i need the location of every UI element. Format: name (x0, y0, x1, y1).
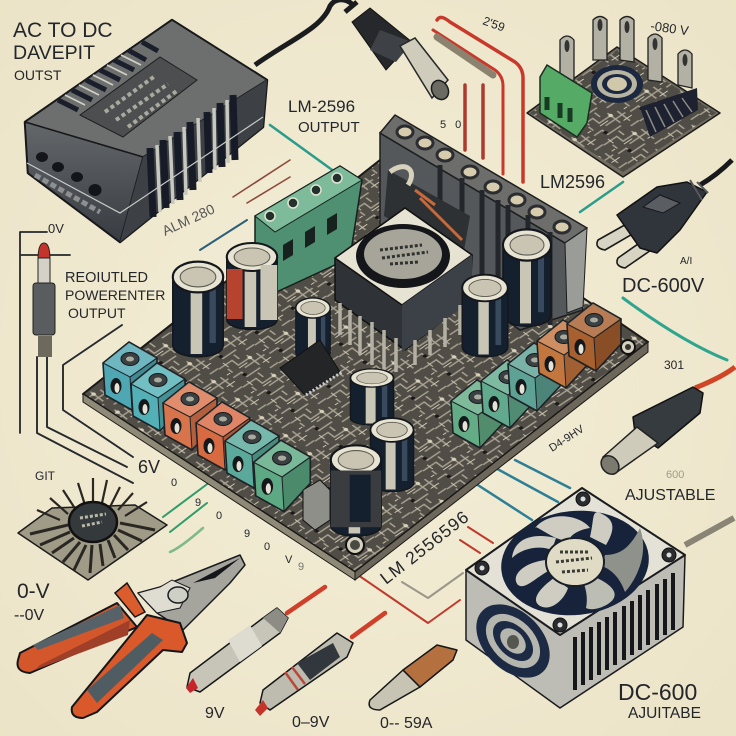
label: LM-2596 output (288, 97, 360, 136)
top DC barrel plug and cable (255, 0, 452, 103)
small handwritten annotations: 0 (216, 510, 222, 522)
small handwritten annotations: 0V (48, 221, 64, 236)
small handwritten annotations: 9 (195, 497, 201, 509)
label: regulated power output: OUTPUT (68, 305, 126, 321)
small handwritten annotations: 5 0 (440, 119, 464, 131)
label: DC-600 adjustable (618, 679, 701, 722)
label: DC-600V: DC-600V (622, 275, 705, 297)
AC power plug and cord (597, 160, 732, 268)
rear terminal block with heat sink (380, 115, 587, 330)
label: regulated power output: POWERENTER (65, 287, 165, 303)
small handwritten annotations: GIT (35, 469, 56, 483)
right DC connector (597, 367, 735, 478)
small handwritten annotations: A/I (680, 256, 692, 267)
top-right small board (527, 16, 720, 177)
label: 9V: 9V (205, 705, 225, 722)
label: 0-V: 0-V (17, 580, 50, 603)
small handwritten annotations: 2'59 (481, 14, 507, 35)
black IC chip (280, 340, 342, 395)
label: AC to DC title: OUTST (14, 67, 62, 83)
capacitors on main board (173, 229, 551, 536)
probe connector two (255, 613, 385, 716)
probe connector one (186, 587, 325, 693)
label: 6V: 6V (138, 457, 160, 477)
label: regulated power output: REOIUTLED (65, 270, 148, 286)
small handwritten annotations: 0 (264, 541, 270, 553)
right terminal blocks (451, 303, 621, 448)
small handwritten annotations: ALM 280 (160, 200, 217, 239)
small handwritten annotations (35, 14, 692, 573)
small handwritten annotations: 301 (664, 358, 684, 372)
label: LM2596: LM2596 (540, 172, 605, 192)
label: adjustable: AJUSTABLE (625, 487, 715, 504)
label: LM-2596 output: OUTPUT (298, 119, 360, 136)
cooling fan power supply (462, 488, 734, 708)
main circuit board (83, 160, 648, 580)
connection wires (20, 17, 727, 623)
small handwritten annotations: 9 (244, 528, 250, 540)
orange-handled pliers (18, 555, 245, 718)
small handwritten annotations: V (285, 554, 293, 566)
label: 0-V: --0V (14, 607, 45, 624)
small handwritten annotations: D4-9HV (547, 423, 587, 455)
small handwritten annotations: -080 V (650, 18, 690, 38)
label: LM 2556596: LM 2556596 (376, 506, 473, 588)
label: LM-2596 output: LM-2596 (288, 97, 355, 116)
audio jack on left (33, 243, 55, 357)
label: DC-600 adjustable: DC-600 (618, 679, 697, 705)
label: regulated power output (65, 270, 165, 321)
lower-left terminal blocks (103, 342, 330, 530)
label: AC to DC title (13, 19, 113, 83)
AC to DC power adapter (25, 20, 267, 242)
label: AC to DC title: AC TO DC (13, 19, 113, 42)
label: AC to DC title: DAVEPIT (13, 42, 95, 64)
label: 0--9V: 0–9V (292, 714, 330, 731)
small handwritten annotations: 600 (666, 469, 684, 481)
small handwritten annotations: 9 (298, 561, 304, 573)
small handwritten annotations: 0 (171, 477, 177, 489)
label: 0-- 59A: 0-- 59A (380, 715, 433, 732)
label: 0-V (14, 580, 50, 624)
upper green terminal block (255, 166, 362, 295)
bottom-left chip with pins (18, 478, 167, 580)
central transformer (335, 208, 472, 372)
label: DC-600 adjustable: AJUITABE (628, 705, 701, 722)
probe connector three (369, 645, 457, 710)
